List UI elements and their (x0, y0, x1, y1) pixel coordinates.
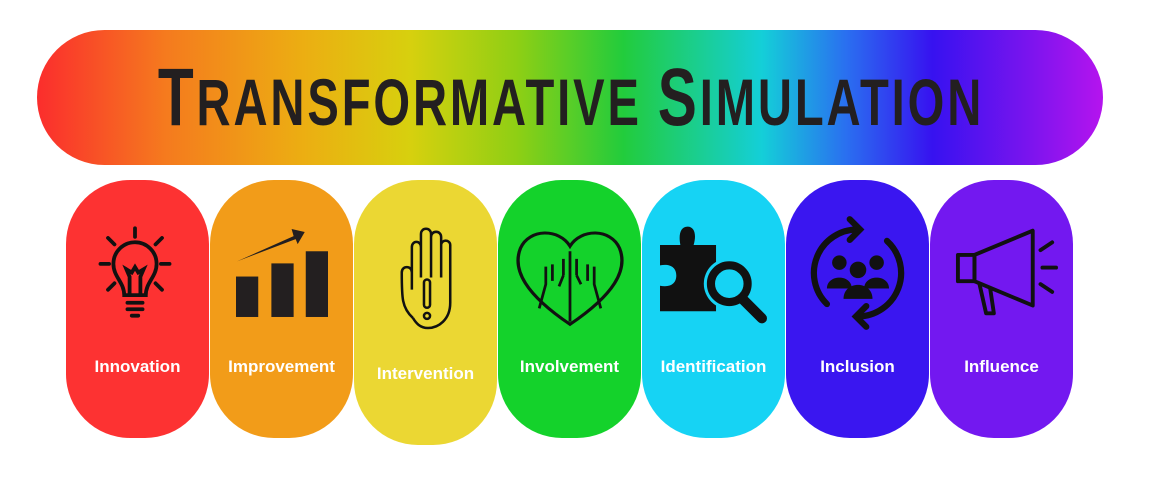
label: Involvement (520, 357, 619, 376)
card: involvement (498, 180, 641, 438)
icon: megaphone (956, 228, 1058, 316)
title text: TRANSFORMATIVE SIMULATION (158, 52, 984, 143)
icon: light bulb (98, 226, 172, 318)
label: Identification (661, 357, 766, 376)
label: Improvement (228, 357, 335, 376)
icon: hand with exclamation (400, 228, 452, 330)
card: inclusion (786, 180, 929, 438)
label: Inclusion (820, 357, 895, 376)
label: Innovation (95, 357, 180, 376)
icon: people in cycle (810, 216, 904, 330)
icon: puzzle with magnifier (660, 226, 767, 324)
card: identification (642, 180, 785, 438)
card: intervention (354, 180, 497, 445)
label: Intervention (377, 364, 474, 383)
card: improvement (210, 180, 353, 438)
label: Influence (964, 357, 1039, 376)
card: innovation (66, 180, 209, 438)
icon: heart with hands (516, 232, 624, 326)
title banner (37, 30, 1103, 165)
icon: bar chart with arrow (236, 229, 328, 317)
card: influence (930, 180, 1073, 438)
